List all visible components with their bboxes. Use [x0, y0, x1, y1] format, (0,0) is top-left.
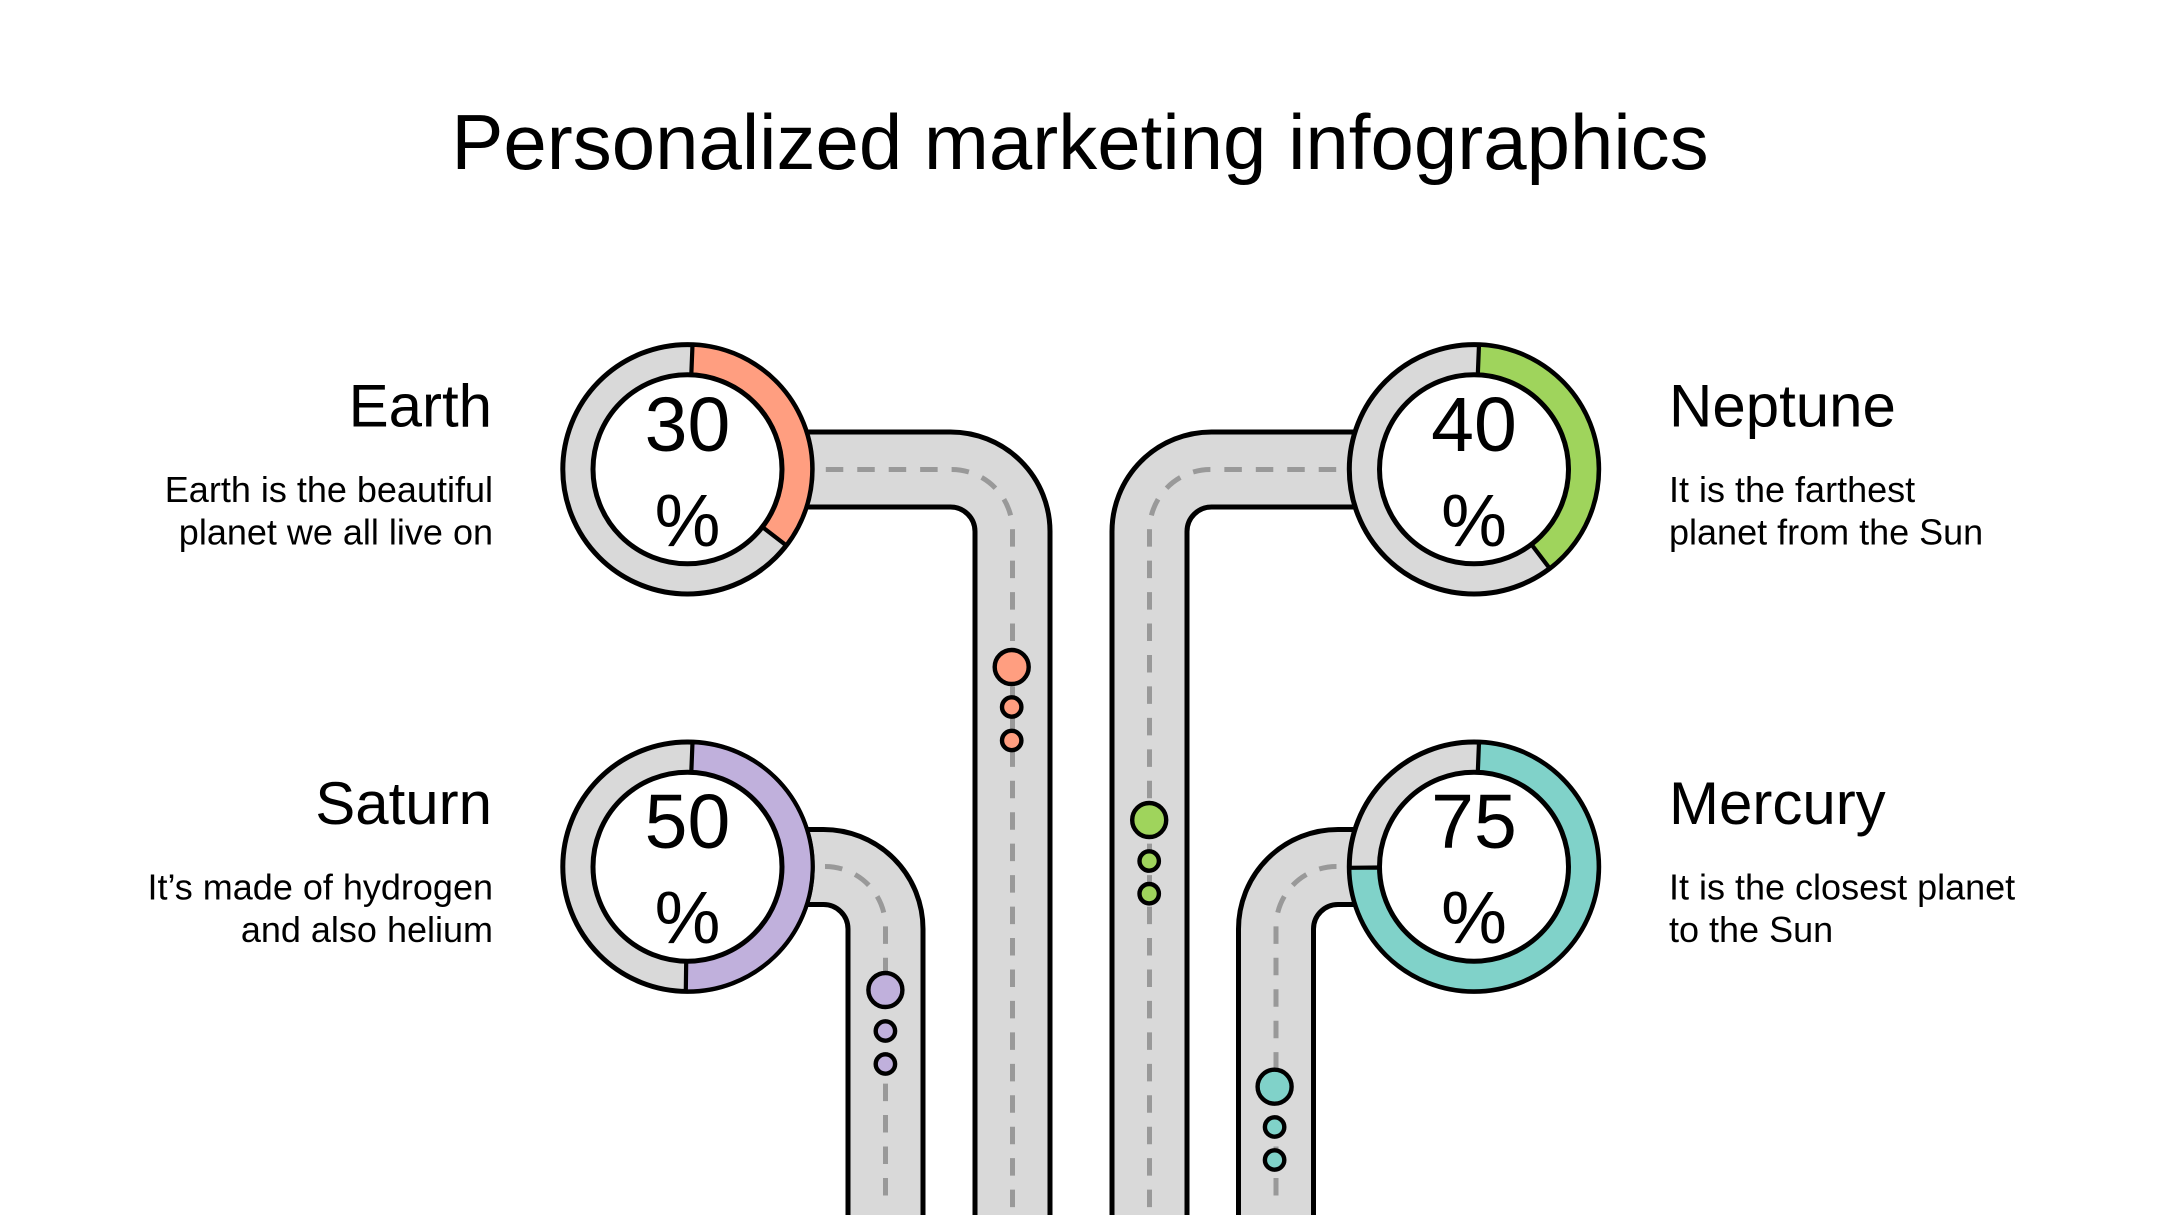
gauge: Saturn 50% [563, 742, 813, 991]
label: Mercury: It is the closest planet [1669, 866, 2015, 908]
gauge: Saturn 50%: % [655, 876, 720, 959]
dots: Earth [995, 650, 1029, 750]
gauge: Earth 30%: 30 [645, 382, 730, 468]
label: Saturn: It’s made of hydrogen [147, 866, 493, 908]
label: Neptune: It is the farthest [1669, 469, 1915, 510]
label: Mercury: to the Sun [1669, 909, 1833, 950]
road: Saturn [690, 866, 886, 1215]
gauge: Mercury 75% [1349, 742, 1599, 991]
gauge: Earth 30%: % [655, 479, 720, 562]
road: Neptune [1150, 470, 1472, 1215]
label: Neptune [1669, 372, 1983, 552]
label: Saturn: Saturn [315, 770, 492, 837]
gauge: Mercury 75%: 75 [1431, 779, 1517, 865]
label: Earth: Earth [349, 372, 492, 440]
label: Mercury: Mercury [1669, 770, 1886, 837]
dots: Saturn [868, 973, 902, 1074]
label: Neptune: planet from the Sun [1669, 512, 1983, 552]
label: Earth: Earth is the beautiful [165, 469, 493, 510]
label: Saturn [147, 770, 493, 950]
label: Earth [165, 372, 493, 552]
label: Neptune: Neptune [1669, 372, 1896, 440]
label: Mercury [1669, 770, 2015, 950]
gauge: Neptune 40% [1349, 345, 1599, 594]
gauge: Mercury 75%: % [1441, 876, 1507, 959]
gauge: Neptune 40%: % [1441, 479, 1507, 562]
road: Earth [690, 470, 1012, 1215]
gauge: Earth 30% [563, 345, 812, 594]
dots: Neptune [1132, 803, 1166, 903]
title: Personalized marketing infographics [451, 98, 1709, 186]
road: Mercury [1276, 866, 1472, 1215]
label: Earth: planet we all live on [179, 512, 493, 552]
gauge: Saturn 50%: 50 [645, 779, 730, 865]
gauge: Neptune 40%: 40 [1431, 382, 1517, 468]
dots: Mercury [1258, 1070, 1292, 1170]
label: Saturn: and also helium [241, 909, 493, 950]
